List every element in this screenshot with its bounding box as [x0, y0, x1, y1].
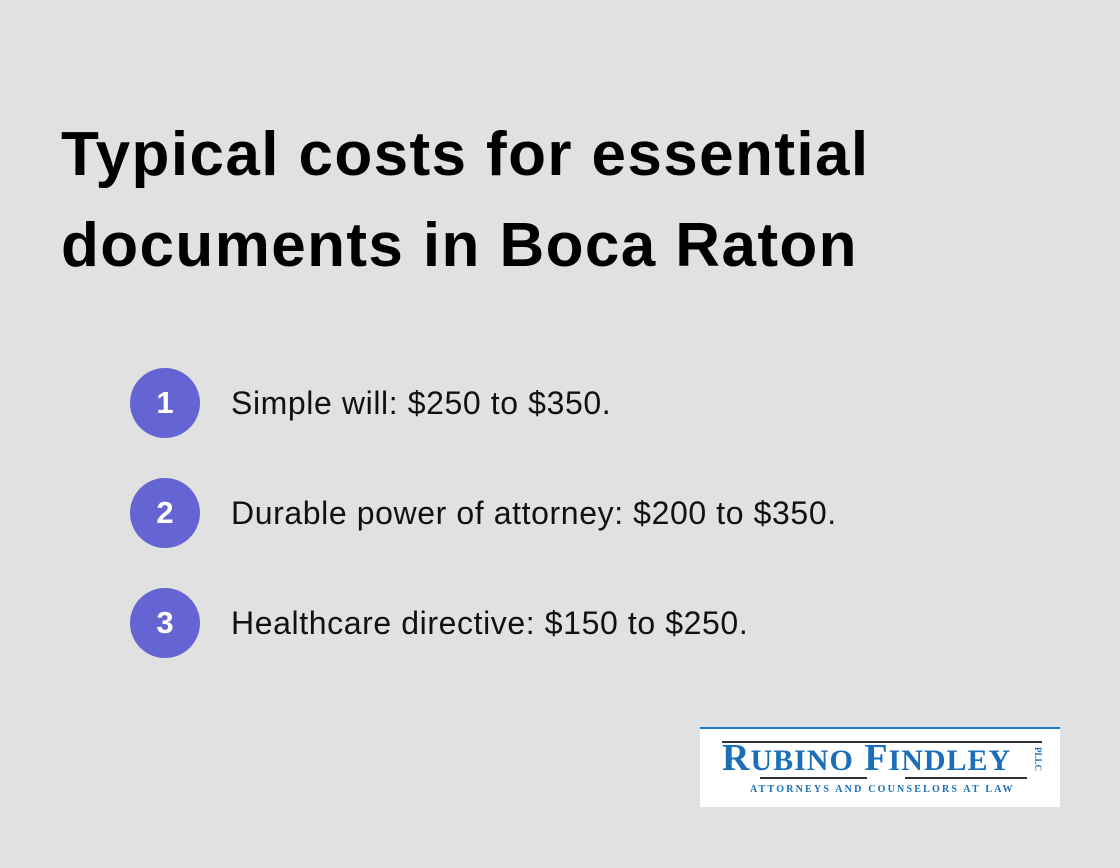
item text 2: Durable power of attorney: $200 to $350. [231, 495, 837, 531]
number badge 2: 2 [156, 495, 174, 530]
number badge 2 [130, 478, 200, 548]
item text 1: Simple will: $250 to $350. [231, 385, 611, 421]
list item 3 [130, 588, 748, 658]
list item 1 [130, 368, 611, 438]
number badge 1: 1 [156, 385, 174, 420]
logo: Rubino Findley: RUBINO FINDLEY [722, 737, 1011, 779]
title: documents in Boca Raton [61, 211, 858, 280]
logo: Rubino Findley: PLLC [1033, 747, 1043, 771]
item text 3: Healthcare directive: $150 to $250. [231, 605, 748, 641]
title: Typical costs for essential [61, 120, 870, 189]
number badge 3 [130, 588, 200, 658]
title [61, 120, 870, 280]
logo: Rubino Findley [700, 727, 1060, 807]
number badge 3: 3 [156, 605, 174, 640]
list item 2 [130, 478, 837, 548]
number badge 1 [130, 368, 200, 438]
logo: Rubino Findley: ATTORNEYS AND COUNSELORS AT LAW [750, 784, 1015, 795]
